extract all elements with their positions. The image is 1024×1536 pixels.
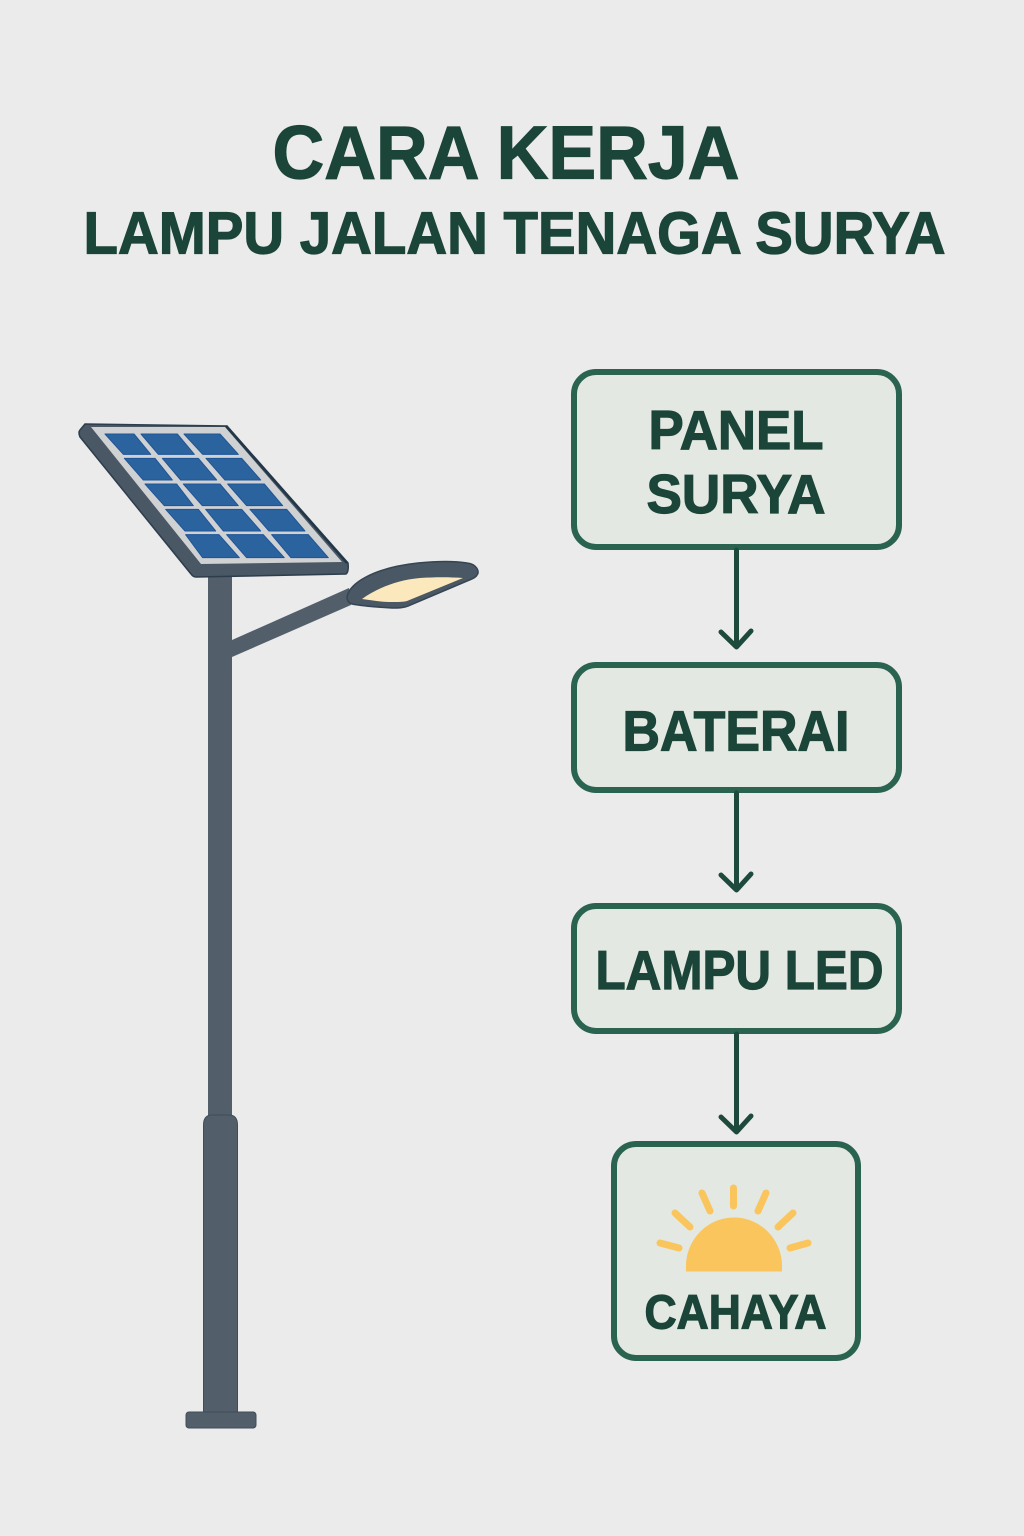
title line 2: LAMPU JALAN TENAGA SURYA — [84, 200, 946, 266]
arrow: battery to led — [721, 793, 751, 890]
title — [84, 110, 946, 266]
lamp arm — [232, 588, 351, 657]
solar panel — [79, 424, 348, 577]
box: lampu led — [574, 906, 899, 1031]
icon: sun — [660, 1188, 808, 1272]
lamp head — [347, 562, 478, 608]
box: cahaya — [614, 1144, 858, 1358]
illustration: solar street lamp — [79, 424, 478, 1428]
panel right edge — [226, 426, 347, 563]
panel face — [91, 427, 342, 564]
arrow: led to light — [721, 1034, 751, 1132]
box: panel surya: PANEL — [648, 399, 824, 461]
box: lampu led: LAMPU LED — [596, 939, 884, 1001]
lamp pole upper — [208, 574, 232, 1119]
box: panel surya: SURYA — [646, 463, 826, 525]
lamp pole lower sleeve — [204, 1115, 238, 1412]
box: baterai: BATERAI — [622, 700, 850, 764]
arrow: panel to battery — [721, 550, 751, 647]
flow diagram — [574, 372, 899, 1358]
panel frame — [79, 424, 348, 577]
panel cells — [105, 434, 328, 558]
box: cahaya: CAHAYA — [644, 1286, 826, 1340]
box: baterai — [574, 665, 899, 790]
box: panel surya — [574, 372, 899, 547]
title line 1: CARA KERJA — [272, 110, 740, 194]
lamp base plate — [186, 1412, 256, 1428]
